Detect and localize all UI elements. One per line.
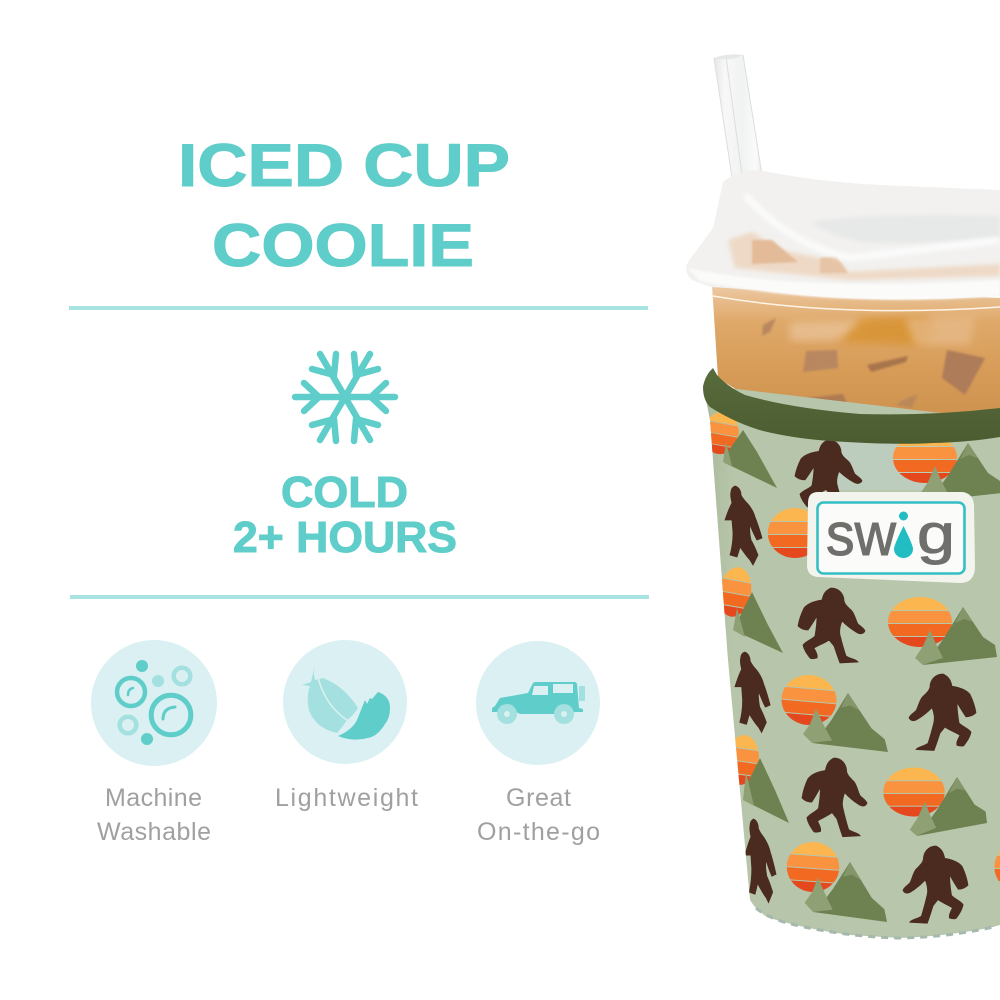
divider	[70, 595, 649, 599]
swig patch: g	[917, 502, 955, 565]
swig patch	[807, 492, 975, 583]
heading: cold 2+ hours: COLD	[281, 468, 408, 517]
label: lightweight: Lightweight	[275, 784, 418, 812]
label: machine washable: Machine	[105, 784, 202, 812]
heading: cold 2+ hours: 2+ HOURS	[233, 513, 457, 562]
product photo: cup with coolie	[686, 54, 1000, 938]
title	[178, 132, 510, 279]
label: machine washable	[97, 784, 211, 846]
collar	[703, 368, 1000, 444]
stitched hem	[756, 908, 993, 938]
straw	[714, 54, 766, 240]
sleeve pattern	[699, 408, 1000, 930]
label: great on-the-go: Great	[506, 784, 571, 812]
label: great on-the-go: On-the-go	[477, 818, 600, 846]
icon: machine washable bubbles	[91, 640, 217, 766]
icon: great on-the-go jeep	[476, 641, 600, 765]
divider	[69, 306, 648, 310]
title: COOLIE	[212, 212, 474, 279]
swig patch: sw	[826, 501, 897, 568]
iced coffee	[712, 285, 1000, 414]
title: ICED CUP	[178, 132, 510, 199]
lid	[686, 170, 1000, 311]
heading: cold 2+ hours	[233, 468, 457, 562]
label: great on-the-go	[477, 784, 600, 846]
label: machine washable: Washable	[97, 818, 211, 846]
icon: snowflake	[295, 354, 395, 441]
coolie sleeve	[699, 385, 1000, 938]
icon: lightweight feather	[283, 640, 407, 764]
